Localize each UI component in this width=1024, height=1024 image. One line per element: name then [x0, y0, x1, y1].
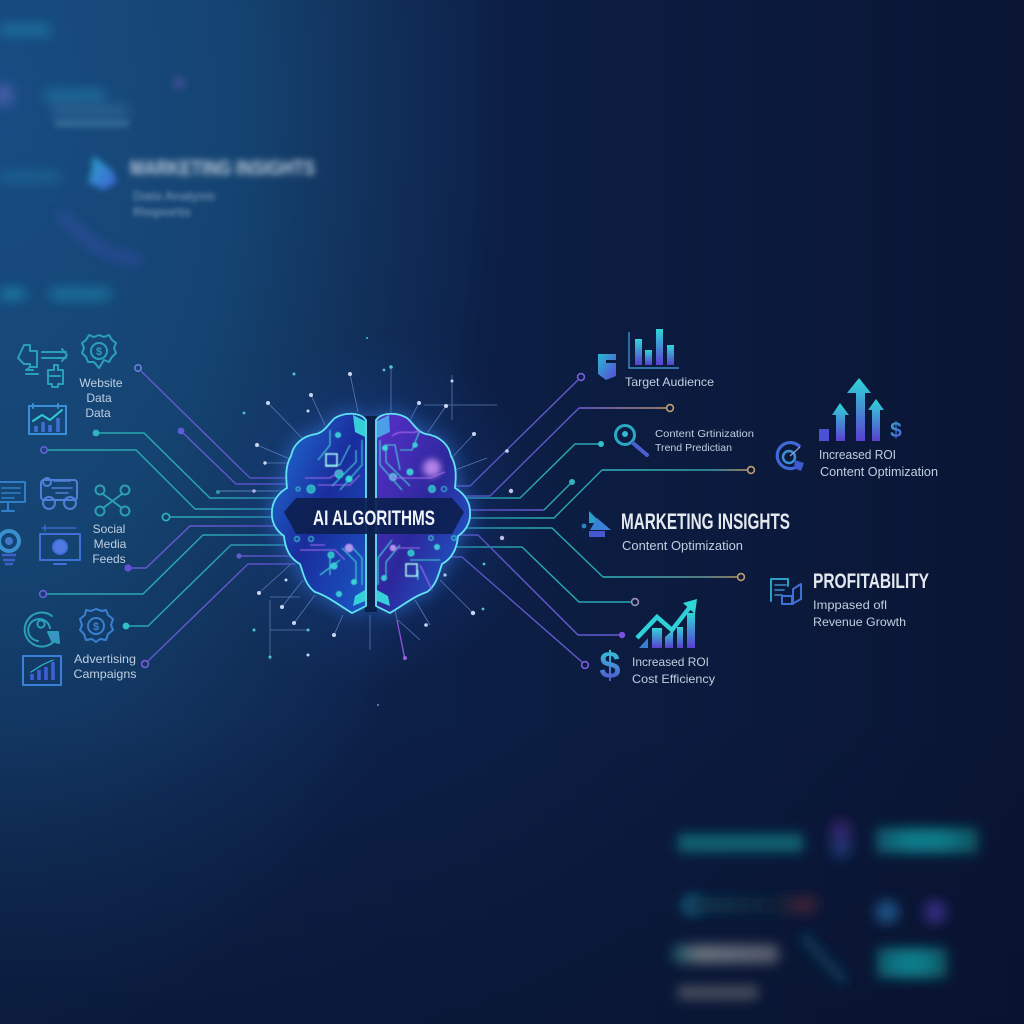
blurred panel: top-left marketing insights: Data Analysis — [133, 189, 215, 203]
blurred panel: bottom-right metrics — [673, 820, 978, 999]
website data text: Data — [86, 391, 112, 405]
text: Content Optimization — [820, 464, 938, 479]
website data text: Website — [79, 376, 123, 390]
brain left hemisphere — [272, 414, 366, 613]
icon: dollar: $ — [599, 645, 621, 687]
blurred panel: top-left marketing insights — [0, 24, 315, 300]
blurred panel: top-left marketing insights: Reports — [133, 205, 191, 219]
profitability text — [813, 598, 906, 629]
icon: growth report — [23, 656, 61, 685]
icon: rising arrows: $ — [890, 419, 902, 442]
output: profitability — [771, 570, 929, 629]
ROI text — [632, 655, 715, 686]
input: social media feeds — [0, 478, 130, 566]
icon: target — [777, 443, 804, 471]
icon: monitor — [0, 482, 25, 511]
icon: dollar gear: $ — [96, 346, 102, 358]
website data text: Data — [85, 406, 111, 420]
output: increased ROI, cost efficiency — [599, 599, 715, 687]
icon: sail pyramid — [582, 511, 611, 537]
icon: documents — [771, 579, 801, 604]
social media text: Media — [94, 537, 127, 551]
advertising text: Campaigns — [74, 667, 136, 681]
brain right hemisphere — [376, 414, 470, 613]
output: marketing insights — [582, 509, 790, 553]
icon: data flow gears — [18, 345, 67, 387]
icon: target with hand — [25, 613, 59, 647]
circuits right — [378, 430, 456, 585]
brain glow — [272, 414, 470, 613]
social media text — [92, 522, 127, 566]
radiating sparks — [243, 337, 509, 706]
target audience text: Target Audience — [625, 375, 714, 389]
text — [819, 447, 938, 479]
social media text: Social — [93, 522, 125, 536]
advertising text: Advertising — [74, 652, 136, 666]
icon: rising arrows — [819, 378, 902, 442]
icon: magnifier — [616, 426, 647, 455]
text: Increased ROI — [819, 447, 896, 462]
connector lines: inputs — [40, 365, 300, 667]
input: advertising campaigns — [23, 609, 136, 685]
central band — [284, 498, 464, 534]
output: increased ROI, content optimization — [777, 378, 938, 479]
central gap — [365, 416, 377, 612]
blurred panel: top-left marketing insights: MARKETING INSIGHTS — [130, 157, 315, 180]
trend text — [655, 428, 754, 454]
output: target audience — [598, 329, 714, 389]
connector lines: outputs — [450, 374, 754, 668]
subheading: Content Optimization — [622, 538, 743, 553]
profitability text: Revenue Growth — [813, 615, 906, 629]
icon: growth chart — [637, 599, 697, 648]
output: content optimization, trend prediction — [616, 426, 754, 455]
icon: location pin — [0, 531, 19, 564]
heading: MARKETING INSIGHTS — [621, 509, 790, 534]
brain label: AI ALGORITHMS — [313, 507, 435, 530]
brain — [272, 414, 470, 613]
brain halo — [201, 335, 541, 685]
trend text: Content Grtinization — [655, 428, 754, 440]
icon: media device — [41, 478, 77, 509]
input: website data — [18, 335, 123, 434]
profitability text: Imppased ofl — [813, 598, 887, 612]
ROI text: Increased ROI — [632, 655, 709, 669]
profitability heading: PROFITABILITY — [813, 570, 929, 593]
ROI text: Cost Efficiency — [632, 672, 715, 686]
advertising text — [74, 652, 136, 681]
trend text: Trend Predictian — [655, 442, 732, 454]
brain accents — [353, 415, 365, 437]
icon: dashboard chart — [29, 404, 66, 434]
icon: screen with globe — [40, 525, 80, 564]
icon: gear dollar: $ — [93, 621, 99, 633]
website data text — [79, 376, 123, 420]
icon: network scissors — [96, 486, 130, 516]
icon: shield blocks — [598, 354, 616, 380]
social media text: Feeds — [92, 552, 126, 566]
circuits left — [295, 430, 362, 596]
icon: bar chart — [629, 329, 679, 368]
